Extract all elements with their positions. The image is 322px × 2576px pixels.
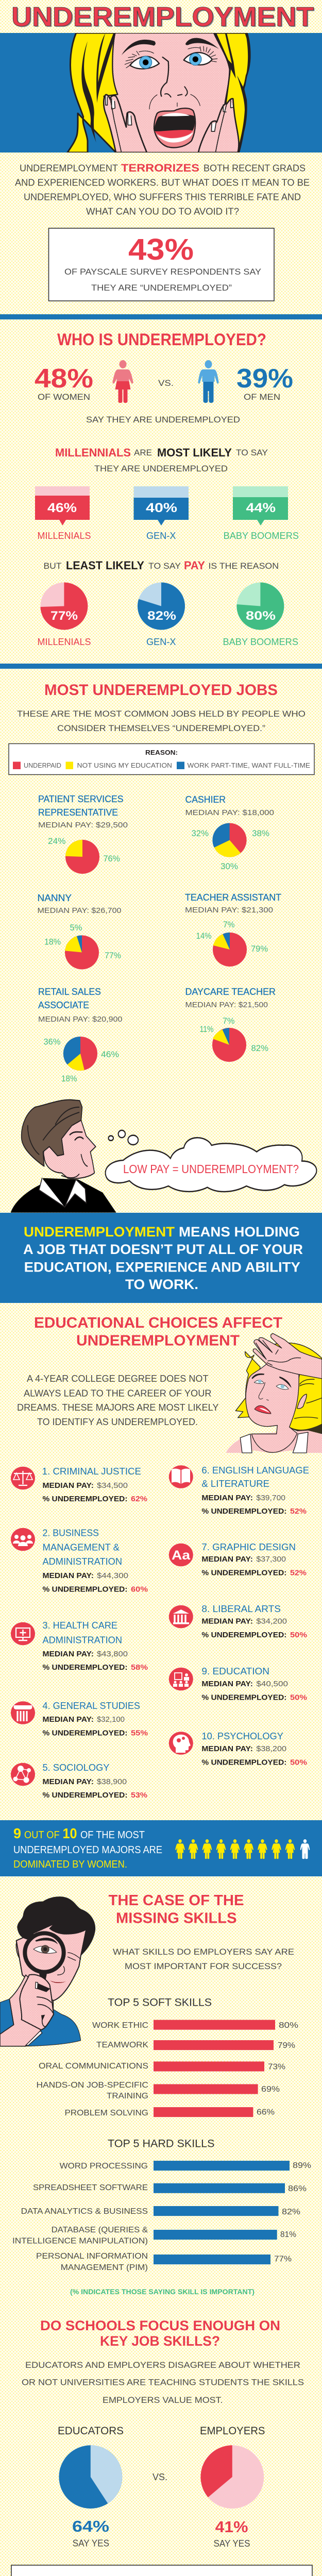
bar chart: soft skills (36, 2020, 298, 2117)
bar chart: hard skills: SPREADSHEET SOFTWARE (33, 2183, 148, 2192)
job: cashier: CASHIER (185, 794, 226, 805)
stat: women: 48% (35, 364, 93, 394)
bar chart: soft skills: 69% (261, 2085, 280, 2094)
heading: educational choices: EDUCATIONAL CHOICES AFFECT (34, 1315, 282, 1331)
bar chart: hard skills: DATABASE (QUERIES & (52, 2226, 148, 2234)
bar chart: soft skills: WORK ETHIC (92, 2021, 148, 2030)
major 1: criminal justice: % UNDEREMPLOYED: (42, 1495, 128, 1503)
legend: reason: WORK PART-TIME, WANT FULL-TIME (188, 761, 310, 769)
heading: do schools focus enough: KEY JOB SKILLS? (100, 2333, 220, 2349)
bar chart: hard skills: INTELLIGENCE MANIPULATION) (12, 2237, 148, 2246)
pie: baby boomers 80 percent (223, 582, 298, 647)
heading: top 5 hard skills: TOP 5 HARD SKILLS (108, 2138, 214, 2149)
callout: 43 percent (48, 228, 274, 301)
major 8: liberal arts: $34,200 (256, 1617, 287, 1626)
major 8: liberal arts: MEDIAN PAY: (201, 1617, 253, 1626)
thought bubble: LOW PAY = UNDEREMPLOYMENT? (123, 1162, 299, 1176)
heading: do schools focus enough: DO SCHOOLS FOCUS ENOUGH ON (40, 2318, 280, 2333)
text: what skills question: WHAT SKILLS DO EMPLOYERS SAY ARE (113, 1947, 294, 1957)
major 10: psychology: MEDIAN PAY: (201, 1744, 253, 1753)
job: patient services representative: 24% (48, 836, 66, 846)
vs label: VS. (152, 2472, 167, 2482)
text: millennials most likely: TO SAY (236, 448, 268, 457)
major 4: general studies: MEDIAN PAY: (42, 1715, 94, 1724)
heading: the case of the missing skills: MISSING SKILLS (116, 1910, 237, 1927)
illustration: thinking man (11, 1100, 116, 1213)
pie: gen-x 82 percent: GEN-X (146, 637, 176, 647)
job: patient services representative: REPRESENTATIVE (38, 807, 118, 818)
text: college degree intro (17, 1374, 218, 1427)
bar chart: soft skills: PROBLEM SOLVING (65, 2109, 148, 2117)
major 7: graphic design: 52% (290, 1568, 307, 1578)
text: college degree intro: DREAMS. THESE MAJORS ARE MOST LIKELY (17, 1402, 218, 1413)
heading: top 5 soft skills: TOP 5 SOFT SKILLS (108, 1997, 212, 2008)
bar chart: soft skills: 80% (279, 2021, 298, 2030)
callout: 43 percent: THEY ARE “UNDEREMPLOYED” (91, 283, 232, 293)
job: patient services representative: MEDIAN PAY: $29,500 (38, 821, 128, 829)
job: cashier (185, 794, 274, 871)
text: millennials most likely: MOST LIKELY (157, 446, 232, 459)
card: millennials 46 percent: 46% (47, 501, 77, 515)
pie: gen-x 82 percent (138, 582, 185, 647)
major 2: business management: % UNDEREMPLOYED: (42, 1585, 128, 1594)
major 2: business management: MANAGEMENT & (42, 1543, 120, 1553)
major 3: health care administration: ADMINISTRATION (42, 1635, 122, 1646)
major 6: english language and literature: & LITERATURE (201, 1479, 269, 1489)
heading: educational choices (34, 1315, 282, 1349)
banner: 9 out of 10 majors: 9 (13, 1825, 21, 1841)
job: nanny: 18% (44, 937, 61, 947)
legend: reason: REASON: (145, 749, 178, 756)
pie: employers 41 percent: EMPLOYERS (200, 2425, 265, 2437)
text: college degree intro: TO IDENTIFY AS UNDEREMPLOYED. (37, 1417, 198, 1427)
banner: definition of underemployment: EDUCATION, EXPERIENCE AND ABILITY (24, 1259, 300, 1275)
text: say they are underemployed: SAY THEY ARE UNDEREMPLOYED (86, 415, 240, 425)
job: cashier: 30% (221, 861, 238, 871)
major 8: liberal arts: 8. LIBERAL ARTS (201, 1604, 281, 1614)
pie: baby boomers 80 percent: BABY BOOMERS (223, 637, 298, 647)
intro text: WHAT CAN YOU DO TO AVOID IT? (86, 206, 239, 216)
major 7: graphic design (169, 1542, 307, 1578)
job: patient services representative (38, 794, 128, 874)
major 9: education (169, 1666, 307, 1702)
job: nanny: 77% (105, 951, 121, 960)
banner: 9 out of 10 majors: OUT OF (24, 1829, 60, 1841)
major 3: health care administration: $43,800 (97, 1650, 128, 1658)
major 5: sociology (11, 1762, 147, 1800)
title: UNDEREMPLOYMENT (11, 2, 314, 32)
legend: reason: NOT USING MY EDUCATION (77, 761, 172, 769)
stat: women: OF WOMEN (38, 392, 90, 402)
bar chart: hard skills: MANAGEMENT (PIM) (61, 2263, 148, 2272)
job: retail sales associate: 46% (101, 1049, 119, 1059)
callout: 43 percent: OF PAYSCALE SURVEY RESPONDENTS SAY (64, 267, 261, 277)
job: patient services representative: PATIENT SERVICES (38, 794, 124, 804)
job: cashier: 32% (192, 828, 209, 838)
bar chart: hard skills: DATA ANALYTICS & BUSINESS (21, 2207, 148, 2216)
callout: closing advice (11, 2565, 312, 2576)
bar chart: hard skills: 89% (293, 2161, 311, 2170)
heading: educational choices: UNDEREMPLOYMENT (76, 1332, 240, 1349)
intro text: UNDEREMPLOYMENT (20, 163, 118, 173)
job: daycare teacher: 7% (223, 1016, 235, 1026)
job: cashier: MEDIAN PAY: $18,000 (185, 808, 274, 817)
bar chart: hard skills: PERSONAL INFORMATION (36, 2252, 148, 2261)
text: millennials most likely: ARE (134, 448, 152, 457)
bar chart: soft skills: 66% (257, 2108, 275, 2116)
job: cashier: 38% (252, 828, 269, 838)
bar chart: hard skills: WORD PROCESSING (60, 2162, 148, 2171)
job: teacher assistant: 7% (223, 920, 235, 929)
intro text: BOTH RECENT GRADS (204, 163, 306, 173)
pie: educators 64 percent (58, 2425, 124, 2548)
major 10: psychology (169, 1731, 307, 1767)
major 9: education: % UNDEREMPLOYED: (201, 1693, 286, 1702)
major 4: general studies (11, 1701, 148, 1737)
pie: educators 64 percent: 64% (72, 2517, 109, 2535)
major 2: business management: ADMINISTRATION (42, 1556, 122, 1567)
hero banner: screaming woman (0, 33, 322, 152)
job: nanny (37, 893, 122, 970)
intro text: UNDEREMPLOYED, WHO SUFFERS THIS TERRIBLE FATE AND (24, 192, 301, 202)
major 6: english language and literature: % UNDEREMPLOYED: (201, 1507, 286, 1516)
major 3: health care administration (11, 1620, 148, 1672)
major 6: english language and literature: $39,700 (256, 1494, 285, 1502)
job: patient services representative: 76% (103, 854, 120, 863)
job: teacher assistant: MEDIAN PAY: $21,300 (185, 906, 273, 914)
major 8: liberal arts: % UNDEREMPLOYED: (201, 1631, 286, 1639)
major 6: english language and literature: 6. ENGLISH LANGUAGE (201, 1465, 309, 1476)
text: least likely to say pay: TO SAY (148, 561, 181, 571)
bar chart: soft skills: TEAMWORK (96, 2041, 148, 2049)
bar chart: hard skills (12, 2161, 311, 2272)
intro text: TERRORIZES (121, 162, 199, 174)
text: college degree intro: A 4-YEAR COLLEGE DEGREE DOES NOT (27, 1374, 208, 1384)
bar chart: soft skills: TRAINING (107, 2092, 148, 2100)
text: educators and employers disagree: OR NOT UNIVERSITIES ARE TEACHING STUDENTS THE SKILLS (22, 2378, 304, 2387)
text: least likely to say pay: IS THE REASON (208, 561, 279, 571)
text: educators and employers disagree: EDUCATORS AND EMPLOYERS DISAGREE ABOUT WHETHER (25, 2360, 300, 2370)
card: gen-x 40 percent: GEN-X (146, 531, 176, 541)
banner: definition of underemployment: A JOB THAT DOESN’T PUT ALL OF YOUR (23, 1242, 303, 1257)
card: baby boomers 44 percent: BABY BOOMERS (224, 531, 299, 541)
card: baby boomers 44 percent (224, 486, 299, 541)
banner: 9 out of 10 majors: 10 (63, 1825, 77, 1841)
heading: who is underemployed: WHO IS UNDEREMPLOYED? (57, 330, 266, 349)
thought bubble (106, 1130, 316, 1192)
pie: gen-x 82 percent: 82% (147, 609, 176, 623)
stat: men: OF MEN (244, 392, 280, 402)
job: retail sales associate: 36% (43, 1037, 61, 1047)
major 7: graphic design: $37,300 (256, 1555, 286, 1564)
text: millennials most likely: MILLENNIALS (55, 446, 131, 459)
heading: the case of the missing skills (108, 1892, 244, 1927)
icon: man (198, 360, 219, 403)
pie: baby boomers 80 percent: 80% (246, 609, 276, 623)
banner: 9 out of 10 majors (0, 1820, 322, 1876)
major 1: criminal justice: 62% (131, 1495, 147, 1503)
major 2: business management: $44,300 (97, 1571, 128, 1580)
major 8: liberal arts (169, 1604, 307, 1639)
major 7: graphic design: MEDIAN PAY: (201, 1555, 253, 1564)
text: millennials most likely (55, 446, 268, 473)
major 10: psychology: 50% (290, 1758, 307, 1767)
major 4: general studies: % UNDEREMPLOYED: (42, 1729, 128, 1737)
text: least likely to say pay: BUT (43, 561, 62, 571)
major 9: education: 50% (290, 1693, 307, 1702)
bar chart: hard skills: 82% (282, 2208, 300, 2216)
pie: employers 41 percent (200, 2425, 265, 2549)
major 5: sociology: 53% (131, 1791, 147, 1800)
card: millennials 46 percent (35, 486, 91, 541)
major 1: criminal justice: MEDIAN PAY: (42, 1481, 94, 1490)
text: jobs intro: THESE ARE THE MOST COMMON JOBS HELD BY PEOPLE WHO (17, 709, 306, 719)
pie: millennials 77 percent: 77% (50, 609, 78, 623)
major 4: general studies: $32,100 (97, 1715, 125, 1724)
job: teacher assistant: 79% (251, 944, 268, 954)
major 1: criminal justice: 1. CRIMINAL JUSTICE (42, 1466, 141, 1477)
card: gen-x 40 percent (134, 486, 189, 541)
bar chart: soft skills: 79% (278, 2041, 295, 2050)
banner: definition of underemployment: TO WORK. (125, 1277, 198, 1292)
major 5: sociology: $38,900 (97, 1777, 127, 1786)
card: millennials 46 percent: MILLENIALS (37, 531, 91, 541)
vs label: VS. (158, 378, 174, 388)
legend: reason: UNDERPAID (24, 761, 61, 769)
banner: definition of underemployment: MEANS HOLDING (179, 1224, 300, 1240)
major 6: english language and literature: MEDIAN PAY: (201, 1494, 253, 1502)
major 7: graphic design: 7. GRAPHIC DESIGN (201, 1542, 296, 1552)
banner: 9 out of 10 majors: OF THE MOST (80, 1829, 145, 1841)
job: retail sales associate: 18% (61, 1074, 77, 1083)
pie: millennials 77 percent: MILLENIALS (37, 637, 91, 647)
card: baby boomers 44 percent: 44% (246, 501, 276, 515)
major 2: business management: 60% (131, 1585, 148, 1594)
text: jobs intro (17, 709, 306, 733)
major 1: criminal justice (11, 1466, 147, 1503)
major 7: graphic design: % UNDEREMPLOYED: (201, 1568, 286, 1578)
major 5: sociology: 5. SOCIOLOGY (42, 1762, 109, 1773)
major 10: psychology: 10. PSYCHOLOGY (201, 1731, 283, 1741)
major 2: business management (11, 1528, 148, 1594)
job: teacher assistant: TEACHER ASSISTANT (185, 892, 281, 903)
banner: definition of underemployment: UNDEREMPLOYMENT (24, 1224, 175, 1240)
text: least likely to say pay: LEAST LIKELY (66, 559, 144, 572)
text: educators and employers disagree: EMPLOYERS VALUE MOST. (103, 2395, 223, 2405)
job: daycare teacher: 82% (251, 1043, 268, 1053)
text: least likely to say pay (43, 559, 279, 572)
heading: most underemployed jobs: MOST UNDEREMPLOYED JOBS (44, 682, 278, 699)
note: percent meaning: (% INDICATES THOSE SAYING SKILL IS IMPORTANT) (70, 2287, 255, 2296)
bar chart: hard skills: 86% (288, 2184, 307, 2193)
major 3: health care administration: 58% (131, 1663, 148, 1672)
bar chart: hard skills: 81% (280, 2230, 296, 2239)
major 4: general studies: 55% (131, 1729, 148, 1737)
major 10: psychology: % UNDEREMPLOYED: (201, 1758, 286, 1767)
major 5: sociology: MEDIAN PAY: (42, 1777, 94, 1786)
text: educators and employers disagree (22, 2360, 304, 2405)
bar chart: soft skills: ORAL COMMUNICATIONS (39, 2062, 148, 2071)
job: nanny: MEDIAN PAY: $26,700 (37, 906, 122, 915)
pie: employers 41 percent: 41% (215, 2518, 248, 2536)
job: nanny: NANNY (37, 893, 72, 903)
job: daycare teacher: MEDIAN PAY: $21,500 (185, 1001, 268, 1009)
text: what skills question (113, 1947, 294, 1971)
title: UNDEREMPLOYMENT (12, 3, 315, 33)
job: daycare teacher: DAYCARE TEACHER (185, 987, 276, 997)
text: college degree intro: ALWAYS LEAD TO THE CAREER OF YOUR (24, 1388, 212, 1398)
bar chart: hard skills: 77% (274, 2255, 292, 2264)
major 6: english language and literature (169, 1465, 309, 1516)
job: daycare teacher (185, 987, 276, 1062)
major 1: criminal justice: $34,500 (97, 1481, 128, 1490)
job: nanny: 5% (70, 923, 82, 933)
heading: the case of the missing skills: THE CASE OF THE (108, 1892, 244, 1909)
icon: woman (112, 360, 133, 403)
legend: reason (9, 744, 314, 775)
illustration: tired woman (226, 1333, 322, 1453)
banner: 9 out of 10 majors: DOMINATED BY WOMEN. (13, 1859, 127, 1870)
pie: millennials 77 percent (37, 582, 91, 647)
bar chart: soft skills: 73% (268, 2063, 285, 2071)
pie: employers 41 percent: SAY YES (213, 2538, 250, 2549)
callout: 43 percent: 43% (128, 233, 194, 266)
bar chart: soft skills: HANDS-ON JOB-SPECIFIC (36, 2081, 148, 2090)
stat: men: 39% (236, 364, 293, 394)
major 7: graphic design: Aa (172, 1548, 191, 1563)
major 3: health care administration: % UNDEREMPLOYED: (42, 1663, 128, 1672)
major 6: english language and literature: 52% (290, 1507, 307, 1516)
intro text (15, 162, 310, 216)
major 9: education: $40,500 (256, 1680, 288, 1688)
text: what skills question: MOST IMPORTANT FOR SUCCESS? (125, 1961, 282, 1971)
major 8: liberal arts: 50% (290, 1631, 307, 1639)
job: teacher assistant: 14% (196, 931, 211, 941)
pie: educators 64 percent: EDUCATORS (58, 2425, 124, 2437)
text: jobs intro: CONSIDER THEMSELVES “UNDEREMPLOYED.” (57, 723, 265, 733)
major 2: business management: MEDIAN PAY: (42, 1571, 94, 1580)
job: daycare teacher: 11% (200, 1024, 213, 1034)
job: retail sales associate: ASSOCIATE (38, 1000, 89, 1010)
icons: nine women and one man (175, 1839, 310, 1859)
banner: 9 out of 10 majors: UNDEREMPLOYED MAJORS ARE (13, 1844, 162, 1856)
major 9: education: 9. EDUCATION (201, 1666, 269, 1676)
major 10: psychology: $38,200 (256, 1744, 286, 1753)
major 9: education: MEDIAN PAY: (201, 1680, 253, 1688)
text: least likely to say pay: PAY (184, 559, 205, 572)
major 5: sociology: % UNDEREMPLOYED: (42, 1791, 128, 1800)
job: teacher assistant (185, 892, 281, 967)
banner: definition of underemployment (0, 1213, 322, 1303)
illustration: detective with magnifying glass (0, 1896, 95, 2046)
major 3: health care administration: 3. HEALTH CARE (42, 1620, 117, 1631)
job: retail sales associate: MEDIAN PAY: $20,900 (38, 1015, 123, 1024)
major 2: business management: 2. BUSINESS (42, 1528, 99, 1538)
card: gen-x 40 percent: 40% (146, 501, 177, 515)
job: retail sales associate: RETAIL SALES (38, 987, 101, 997)
pie: educators 64 percent: SAY YES (73, 2538, 109, 2548)
text: millennials most likely: THEY ARE UNDEREMPLOYED (94, 464, 228, 473)
major 4: general studies: 4. GENERAL STUDIES (42, 1701, 140, 1711)
job: retail sales associate (38, 987, 123, 1083)
intro text: AND EXPERIENCED WORKERS. BUT WHAT DOES IT MEAN TO BE (15, 177, 310, 188)
major 3: health care administration: MEDIAN PAY: (42, 1650, 94, 1658)
heading: do schools focus enough (40, 2318, 280, 2349)
